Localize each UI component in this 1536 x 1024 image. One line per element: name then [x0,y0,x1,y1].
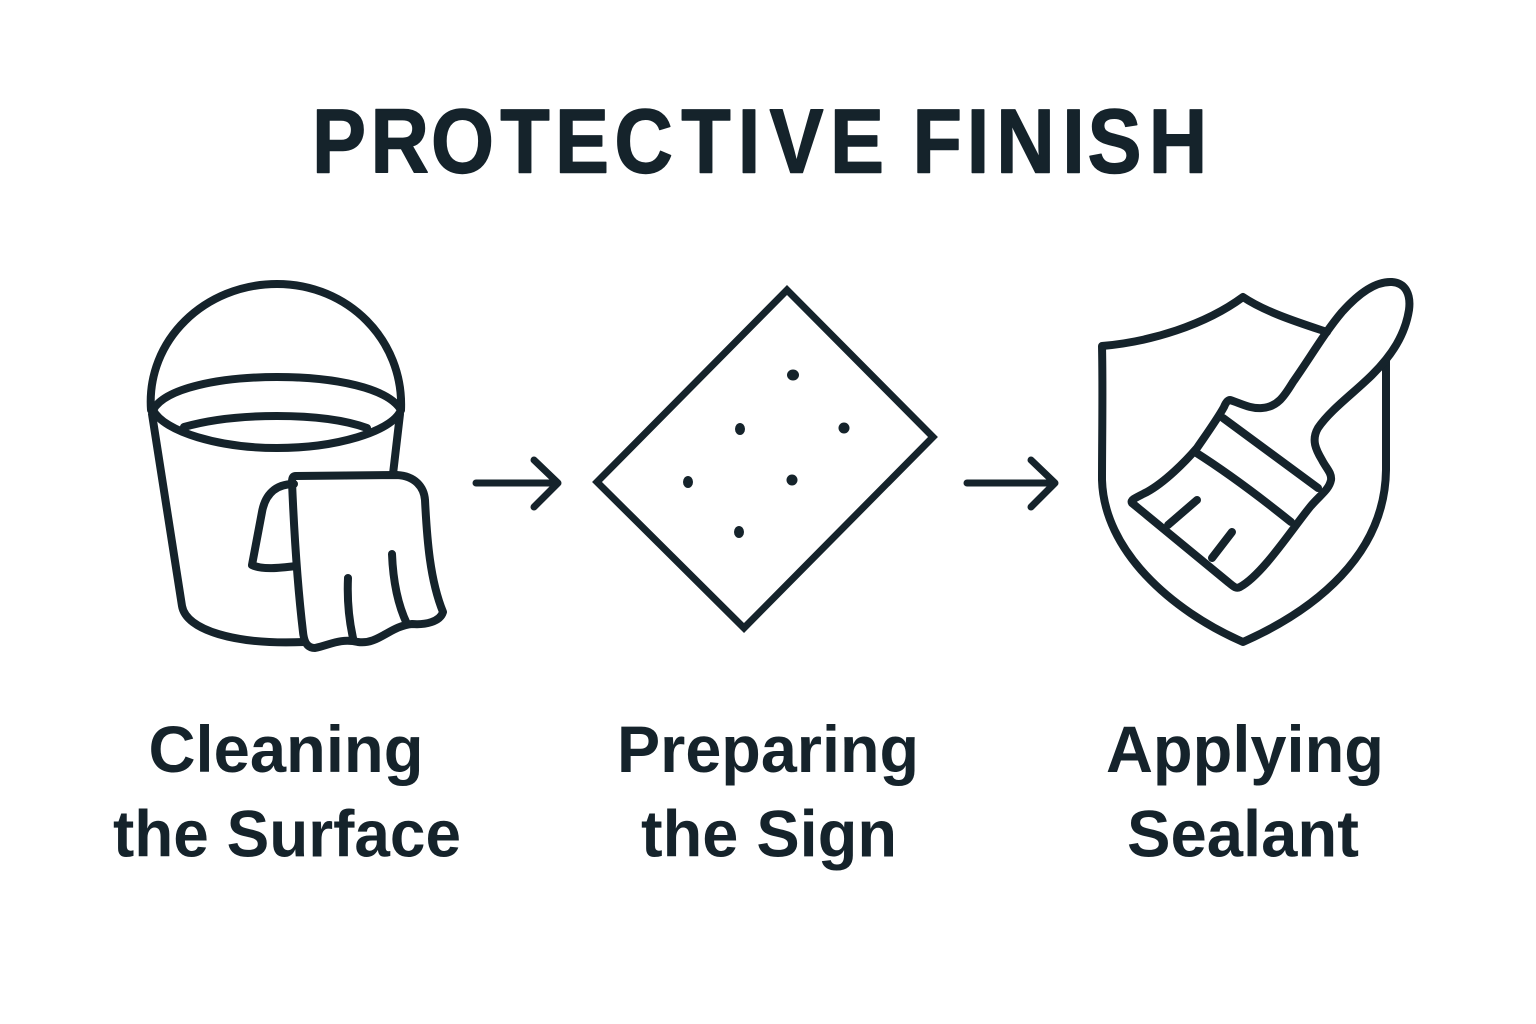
label: cleaning the surface: the Surface [113,796,461,870]
arrow: step two to three [967,460,1055,507]
label: applying sealant: Applying [1106,712,1384,786]
label: cleaning the surface [113,712,461,870]
label: preparing the sign [617,712,919,870]
label: cleaning the surface: Cleaning [148,712,424,786]
icon: shield with brush [1102,282,1409,642]
title: PROTECTIVE FINISH [312,91,1207,192]
label: applying sealant: Sealant [1127,796,1359,870]
icon: bucket with cloth [151,284,443,648]
label: preparing the sign: the Sign [641,796,897,870]
label: applying sealant [1106,712,1384,870]
icon: sign panel [597,290,933,628]
label: preparing the sign: Preparing [617,712,919,786]
arrow: step one to two [476,460,558,507]
